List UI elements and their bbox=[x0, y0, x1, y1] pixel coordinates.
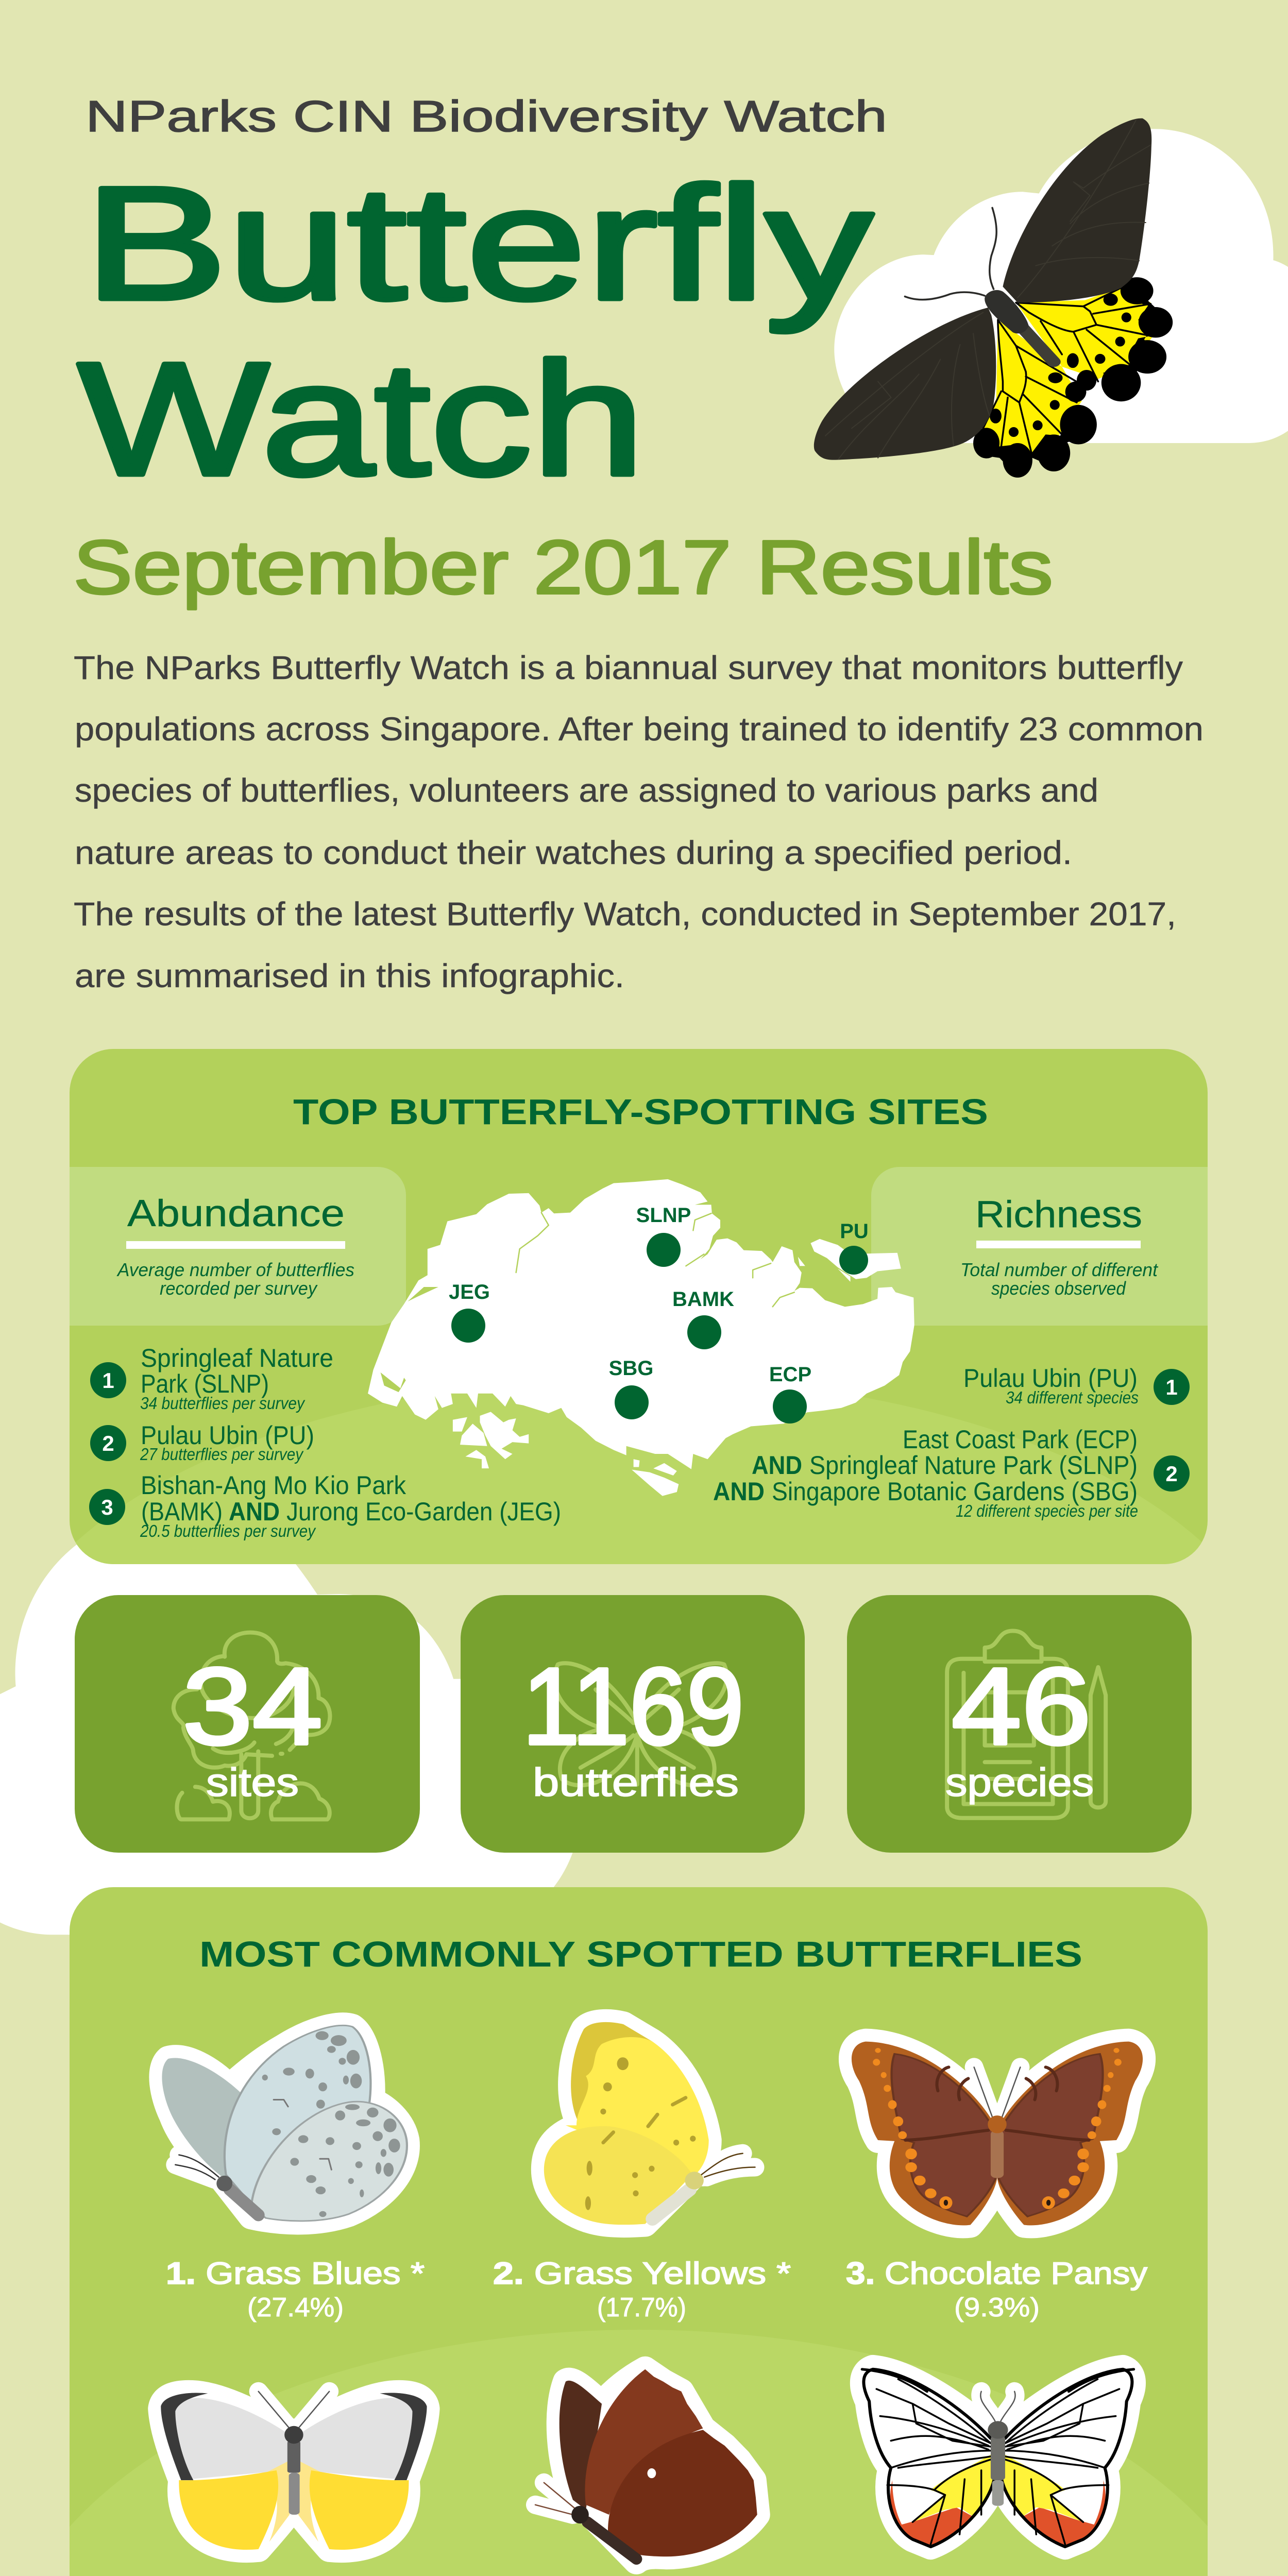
sub-panel: richness: Richness bbox=[975, 1194, 1142, 1235]
butterfly 6: painted jezebel bbox=[862, 2368, 1134, 2547]
stat: 1169 butterflies bbox=[461, 1595, 805, 1853]
butterfly labels: 1. Grass Blues * bbox=[166, 2256, 425, 2291]
ranking: richness: 1 bbox=[1165, 1375, 1178, 1399]
stat: 46 species: 46 bbox=[952, 1645, 1091, 1767]
heading: top sites: TOP BUTTERFLY-SPOTTING SITES bbox=[293, 1092, 988, 1132]
ranking: abundance: 27 butterflies per survey bbox=[140, 1445, 304, 1464]
butterfly 5: common palmfly bbox=[535, 2369, 757, 2562]
map labels: BAMK bbox=[672, 1288, 734, 1311]
stat: 34 sites bbox=[75, 1595, 420, 1853]
icon: hero butterfly bbox=[814, 118, 1173, 478]
stat: 34 sites: 34 bbox=[182, 1645, 323, 1767]
subtitle: September 2017 Results bbox=[73, 525, 1053, 610]
ranking: richness: 34 different species bbox=[1006, 1388, 1139, 1407]
ranking: abundance: 20.5 butterflies per survey bbox=[140, 1521, 316, 1540]
title bbox=[78, 154, 873, 509]
intro paragraph: The NParks Butterfly Watch is a biannual survey that monitors butterfly bbox=[74, 649, 1183, 686]
butterfly percentages: (27.4%) bbox=[247, 2293, 344, 2323]
sub-panel: abundance bbox=[70, 1167, 406, 1326]
stat: 1169 butterflies: butterflies bbox=[533, 1760, 739, 1805]
icon: butterfly outline bbox=[554, 1663, 727, 1785]
butterfly percentages bbox=[247, 2293, 1041, 2576]
butterfly labels: 3. Chocolate Pansy bbox=[846, 2256, 1147, 2291]
intro paragraph: nature areas to conduct their watches during a specified period. bbox=[75, 834, 1072, 871]
butterfly labels: 2. Grass Yellows * bbox=[493, 2256, 791, 2291]
sub-panel: richness: species observed bbox=[991, 1278, 1126, 1299]
sub-panel: richness bbox=[871, 1167, 1208, 1326]
map markers bbox=[451, 1233, 868, 1423]
intro paragraph: populations across Singapore. After being trained to identify 23 common bbox=[75, 710, 1204, 748]
panel: top butterfly-spotting sites bbox=[70, 1049, 1208, 1564]
heading: most common: MOST COMMONLY SPOTTED BUTTERFLIES bbox=[199, 1934, 1082, 1974]
ranking: richness: 12 different species per site bbox=[956, 1501, 1138, 1520]
sub-panel: abundance: Average number of butterflies bbox=[116, 1259, 354, 1280]
map labels: ECP bbox=[769, 1363, 811, 1386]
stat: 46 species: species bbox=[945, 1760, 1094, 1805]
header: programme name: NParks CIN Biodiversity Watch bbox=[86, 92, 887, 141]
ranking: richness: Singapore Botanic Gardens (SBG) bbox=[772, 1477, 1138, 1506]
stat: 46 species bbox=[847, 1595, 1192, 1853]
title: Butterfly bbox=[84, 154, 873, 334]
intro paragraph: species of butterflies, volunteers are assigned to various parks and bbox=[75, 772, 1098, 809]
butterfly 1: grass blues bbox=[162, 2025, 407, 2222]
map of Singapore bbox=[368, 1179, 914, 1496]
ranking: richness: 2 bbox=[1165, 1462, 1178, 1486]
ranking: abundance: (BAMK) bbox=[141, 1497, 223, 1526]
title: Watch bbox=[78, 330, 645, 509]
ranking: richness: AND bbox=[713, 1477, 765, 1506]
icon: clipboard bbox=[947, 1631, 1106, 1818]
butterfly percentages: (9.3%) bbox=[954, 2293, 1040, 2323]
ranking: richness: Pulau Ubin (PU) bbox=[963, 1364, 1138, 1393]
ranking: abundance: Jurong Eco-Garden (JEG) bbox=[286, 1497, 561, 1526]
sub-panel: abundance: recorded per survey bbox=[160, 1278, 318, 1299]
butterfly percentages: (17.7%) bbox=[597, 2293, 686, 2323]
ranking: abundance: 3 bbox=[101, 1495, 113, 1519]
ranking: abundance: 1 bbox=[102, 1368, 114, 1393]
stat: 34 sites: sites bbox=[206, 1760, 299, 1805]
map labels bbox=[449, 1204, 869, 1386]
ranking: abundance: Park (SLNP) bbox=[141, 1369, 269, 1398]
sub-panel: richness: Total number of different bbox=[960, 1259, 1159, 1280]
butterfly 3: chocolate pansy bbox=[852, 2042, 1143, 2225]
ranking: richness: East Coast Park (ECP) bbox=[903, 1425, 1138, 1454]
icon: tree bbox=[174, 1633, 330, 1819]
butterfly labels bbox=[166, 2256, 1147, 2576]
ranking: abundance: AND bbox=[229, 1497, 280, 1526]
ranking: richness bbox=[713, 1364, 1190, 1520]
ranking: abundance bbox=[89, 1344, 561, 1540]
ranking: abundance: Pulau Ubin (PU) bbox=[141, 1421, 314, 1450]
map labels: SBG bbox=[609, 1357, 653, 1380]
map labels: PU bbox=[840, 1220, 869, 1243]
ranking: richness: Springleaf Nature Park (SLNP) bbox=[809, 1451, 1138, 1480]
cloud: hero bbox=[834, 129, 1288, 443]
panel: most commonly spotted butterflies bbox=[70, 1887, 1208, 2576]
butterfly 2: grass yellows bbox=[544, 2022, 755, 2225]
stat: 1169 butterflies: 1169 bbox=[522, 1645, 744, 1767]
intro paragraph: The results of the latest Butterfly Watch, conducted in September 2017, bbox=[74, 895, 1176, 933]
ranking: abundance: 34 butterflies per survey bbox=[140, 1394, 306, 1413]
map labels: JEG bbox=[449, 1281, 490, 1303]
intro paragraph: are summarised in this infographic. bbox=[75, 957, 624, 994]
butterfly 4: emigrants bbox=[161, 2392, 427, 2550]
ranking: abundance: Springleaf Nature bbox=[141, 1344, 333, 1372]
map labels: SLNP bbox=[636, 1204, 691, 1227]
ranking: abundance: 2 bbox=[102, 1431, 114, 1455]
ranking: richness: AND bbox=[752, 1451, 802, 1480]
sub-panel: abundance: Abundance bbox=[127, 1193, 345, 1234]
cloud: left behind stats bbox=[0, 1545, 580, 1935]
ranking: abundance: Bishan-Ang Mo Kio Park bbox=[141, 1471, 406, 1500]
intro paragraph bbox=[74, 649, 1204, 994]
